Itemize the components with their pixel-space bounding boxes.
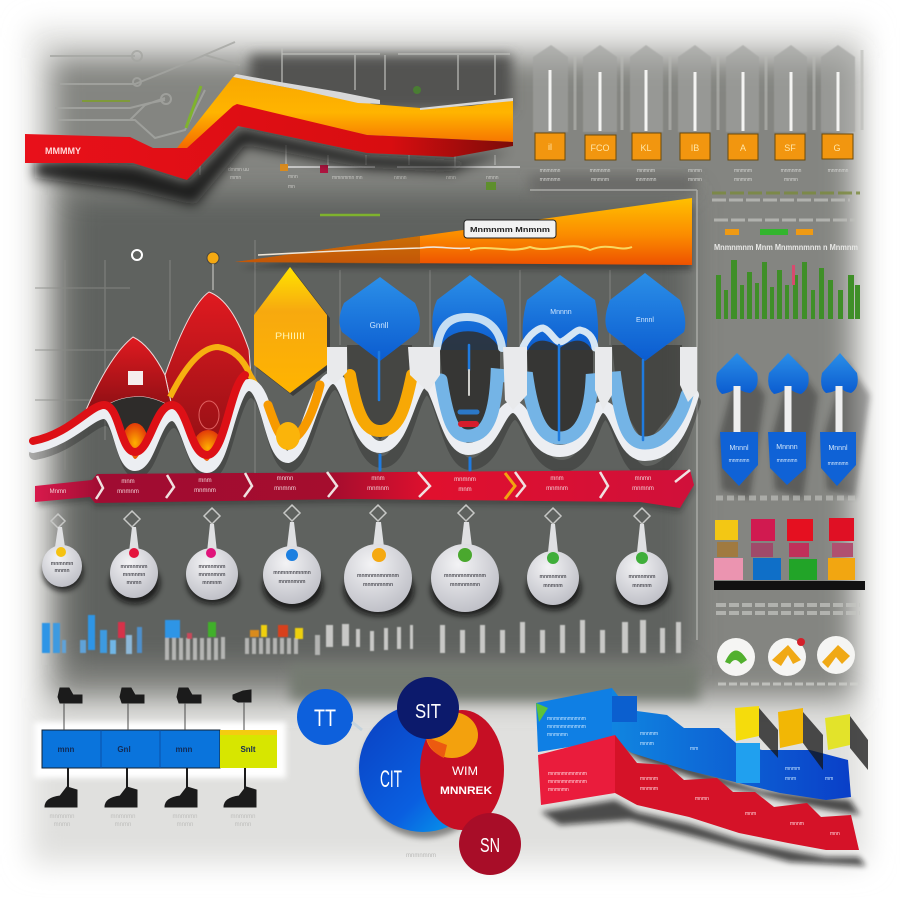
test tube column panel: mnmnmn (828, 168, 849, 174)
blue ribbon: mnmm (785, 766, 800, 772)
bar pins: mnmnmn (49, 814, 75, 820)
blue hexagons: Mnnnn (550, 309, 572, 316)
pleated ribbons (536, 688, 868, 866)
circle: SN (459, 813, 521, 875)
test tube column panel: mnmnmn (590, 168, 611, 174)
top line chart panel: nmnn (394, 175, 407, 181)
red ribbon: mnnm (790, 821, 804, 827)
right blue arrows column: Mnnnl (828, 445, 848, 452)
bottom-left segmented bar: Snlt (240, 745, 256, 754)
label pill (464, 220, 556, 238)
circle cluster (297, 677, 521, 875)
chevron band: mnmn (635, 476, 651, 482)
circle: SN: SN (480, 835, 500, 857)
test tube column panel: mnmnmn (781, 168, 802, 174)
hanging discs row: mnmnmnmnmnm (357, 573, 400, 579)
bar pins: mnmnmn (230, 814, 256, 820)
chevron band: mnmnm (274, 486, 296, 492)
green corner (536, 703, 548, 722)
test tube column panel: il (548, 142, 552, 152)
circle: navy: SIT (415, 701, 441, 723)
main wave ribbon (33, 317, 695, 474)
hanging discs row: mnmnm (632, 583, 652, 589)
chevron band: mnmnm (117, 489, 139, 495)
chevron band: mnm (371, 476, 385, 482)
coloured cube grid (714, 518, 865, 613)
circle: TT (297, 689, 353, 745)
top line chart panel (50, 42, 520, 190)
blue ribbon: mnmnmnmnmnm (547, 716, 586, 722)
right blue arrows column: Mnnnn (776, 444, 798, 451)
hanging discs row: mnmn (54, 568, 70, 574)
blue hexagons (339, 273, 685, 361)
test tube column panel: mnmnm (637, 168, 655, 174)
red ribbon: mnmnm (640, 786, 658, 792)
top line chart panel: mnn (288, 174, 298, 180)
red ribbon: mnmnmn (548, 787, 569, 793)
blue ribbon: mnmnmnmnmnm (547, 724, 586, 730)
hanging discs row: mnmnmnmnmn (273, 570, 311, 576)
test tube column panel: mnmn (784, 177, 798, 183)
hanging discs row (42, 505, 670, 616)
right blue arrows column (716, 353, 870, 498)
hanging discs row: mnmnmnmn (450, 582, 480, 588)
red ribbon: mnmnmnmnmnm (548, 771, 587, 777)
large blue circle (359, 704, 490, 838)
dark wave interiors (347, 345, 682, 445)
chevron band: mnm (121, 479, 135, 485)
bottom-left segmented bar (34, 722, 286, 778)
right green bar chart (712, 193, 860, 319)
top line chart panel: mn (288, 184, 295, 190)
top line chart panel: mmn (230, 175, 241, 181)
hanging discs row: mnmnmnm (199, 564, 226, 570)
top line chart panel: nmnn (486, 175, 499, 181)
blue ribbon: mm (825, 776, 833, 782)
blue hexagons: Ennnl (636, 317, 654, 324)
label pill: Mnmnmm Mnmnm (470, 227, 550, 234)
bottom-left segmented bar: Gnl (117, 745, 131, 754)
hanging discs row: mnmnm (202, 580, 222, 586)
red ribbon: mnmn (695, 796, 709, 802)
chevron band: mnmnm (454, 477, 476, 483)
red ribbon: mnmnm (640, 776, 658, 782)
test tube column panel: A (740, 143, 746, 153)
top line chart panel: mmnmmn mn (332, 175, 363, 181)
red ribbon (538, 735, 859, 850)
chevron band: mnm (458, 487, 472, 493)
right green bar chart: Mnmnmnm Mnm Mnmmnmnm n Mnmnm (714, 243, 858, 252)
test tube column panel: mnmnm (734, 168, 752, 174)
hanging discs row: mnmnm (543, 583, 563, 589)
right blue arrows column: mnmnmn (828, 461, 849, 467)
circle cluster: WIM (452, 764, 478, 778)
bottom-left segmented bar: mnn (58, 745, 75, 754)
bar pins: mnmn (54, 822, 70, 828)
badge icons (717, 636, 858, 684)
chevron band (35, 470, 694, 512)
right blue arrows column: Mnnnl (729, 445, 749, 452)
bar pins: mnmn (177, 822, 193, 828)
hanging discs row: mnmn (126, 580, 142, 586)
test tube column panel: G (833, 143, 841, 153)
bar pins: mnmn (115, 822, 131, 828)
blue hexagons: Gnnll (370, 321, 389, 330)
hanging discs row: mnmnmnm (121, 564, 148, 570)
hanging discs row: mnmnmnm (199, 572, 226, 578)
chevron band: mnm (198, 478, 212, 484)
test tube column panel: mnmnmn (636, 177, 657, 183)
red ribbon: mnmnmnmnmnm (548, 779, 587, 785)
circle: navy (397, 677, 459, 739)
test tube column panel: mnmnm (591, 177, 609, 183)
test tube column panel: mnmnmn (540, 168, 561, 174)
bar pins: mnmnmn (110, 814, 136, 820)
right blue arrows column: mnmnmn (777, 458, 798, 464)
small bar chart strip (42, 615, 681, 660)
test tube column panel (533, 45, 862, 183)
right blue arrows column: mnmnmn (729, 458, 750, 464)
circle cluster: mnmnmnm (406, 853, 436, 859)
test tube column panel: mnmn (688, 168, 702, 174)
chevron band: mnmnm (367, 486, 389, 492)
red circle (420, 710, 504, 830)
test tube column panel: KL (640, 143, 652, 153)
orange overlap (426, 712, 478, 758)
hanging discs row: mnmnmnm (540, 574, 567, 580)
chevron band: mnmnm (194, 488, 216, 494)
test tube column panel: mnmnm (734, 177, 752, 183)
orange hexagon (254, 267, 330, 396)
bar pins: mnmnmn (172, 814, 198, 820)
orange hexagon: PHIIIII (275, 331, 305, 341)
bar pins: mnmn (235, 822, 251, 828)
top line chart panel: nmn (446, 175, 456, 181)
blue ribbon: mnnm (640, 741, 654, 747)
hanging discs row: mnmnmnm (629, 574, 656, 580)
blue ribbon: mm (690, 746, 698, 752)
test tube column panel: mnmn (688, 177, 702, 183)
chevron band: mnmnm (632, 486, 654, 492)
red ribbon: mnn (830, 831, 840, 837)
ribbon label: MMMMY (45, 146, 81, 156)
hanging discs row: mnmnmnmnmnm (444, 573, 487, 579)
hanging discs row: mnmnmn (51, 561, 73, 567)
white brackets (327, 347, 697, 410)
yellow tabs (735, 706, 868, 770)
bottom-left segmented bar: mnn (176, 745, 193, 754)
red peaks (86, 292, 268, 466)
test tube column panel: mnmnmn (540, 177, 561, 183)
bar pins (45, 688, 256, 828)
top ribbon: shadow (35, 128, 510, 205)
red ribbon: mnm (745, 811, 756, 817)
blue ribbon (536, 688, 851, 800)
top ribbon: orange and red (25, 74, 513, 180)
test tube column panel: FCO (590, 143, 610, 153)
hanging discs row: mnmnmnm (279, 579, 306, 585)
hanging discs row: mnmnmnmn (363, 582, 393, 588)
chevron band: mnmn (277, 476, 293, 482)
arch interiors (440, 331, 593, 445)
hanging discs row: mnmnmn (123, 572, 145, 578)
chevron band: mnmnm (546, 486, 568, 492)
circle cluster: MNNREK (440, 785, 492, 797)
blue ribbon: mnm (785, 776, 796, 782)
blue ribbon: mnnmm (640, 731, 658, 737)
blue ribbon: mnmnmn (547, 732, 568, 738)
test tube column panel: IB (691, 143, 699, 153)
top line chart panel: dmmn uu (228, 167, 249, 173)
circle cluster: CIT (380, 766, 402, 793)
chevron band: Mnmn (50, 489, 66, 495)
test tube column panel: SF (784, 143, 796, 153)
orange trend triangle (132, 198, 692, 290)
chevron band: mnm (550, 476, 564, 482)
circle: TT: TT (314, 705, 336, 732)
